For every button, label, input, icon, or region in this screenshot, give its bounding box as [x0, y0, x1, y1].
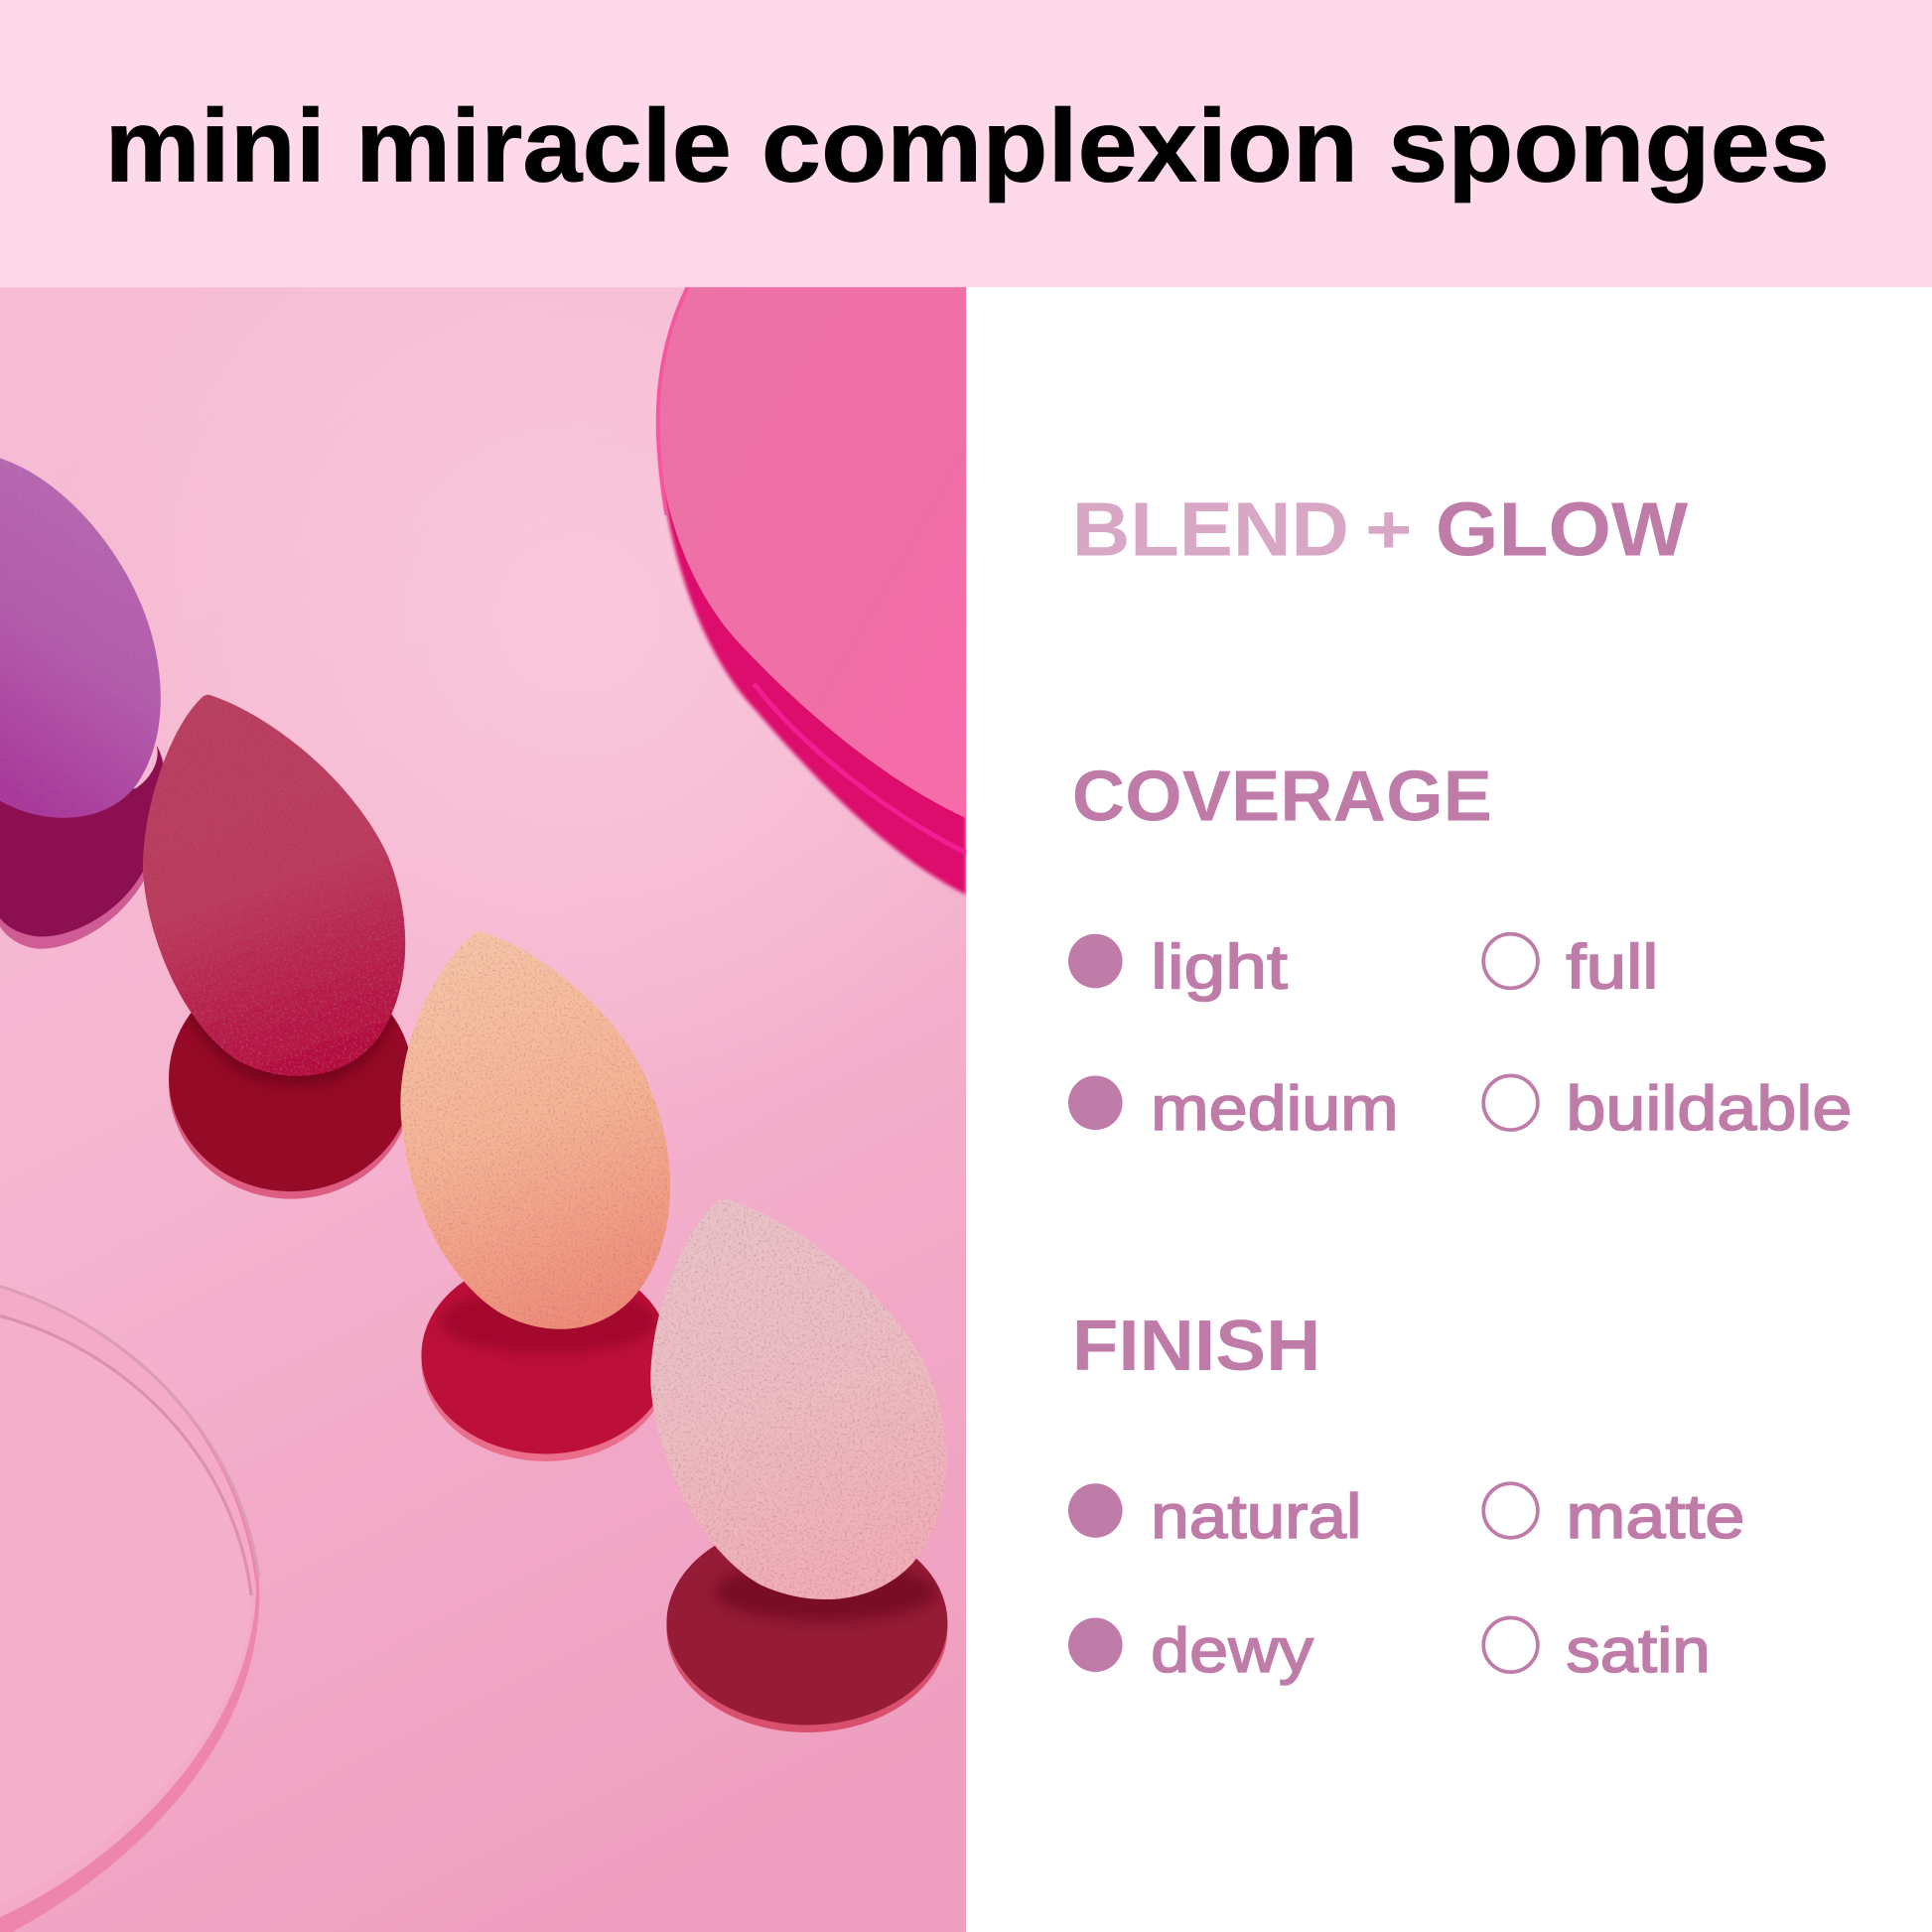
- header band: [0, 0, 1932, 287]
- option: medium: medium: [1151, 1074, 1399, 1144]
- sponge: peach with reflection: [400, 931, 670, 1461]
- option: matte: [1483, 1482, 1744, 1552]
- sponge: red with reflection: [143, 695, 413, 1199]
- panel: benefits: [1068, 487, 1852, 1686]
- sponge: pale pink with reflection: [650, 1198, 947, 1732]
- panel: product photo: [0, 287, 966, 1932]
- option: full: [1483, 932, 1658, 1002]
- heading: blend + glow: GLOW: [1436, 487, 1689, 573]
- option: light: [1068, 932, 1288, 1002]
- option: dewy: [1068, 1616, 1313, 1686]
- option: natural: natural: [1151, 1482, 1361, 1552]
- section: finish: [1068, 1307, 1744, 1686]
- heading: coverage: COVERAGE: [1072, 758, 1492, 837]
- option: buildable: [1483, 1074, 1852, 1144]
- pink acrylic disc: [658, 287, 966, 895]
- section: coverage: [1068, 758, 1852, 1144]
- sponge: purple with reflection: [0, 459, 167, 949]
- option: buildable: buildable: [1566, 1074, 1852, 1144]
- option: natural: [1068, 1482, 1361, 1552]
- option: light: light: [1151, 932, 1288, 1002]
- option: full: full: [1566, 932, 1658, 1002]
- clear acrylic disc: [0, 1287, 259, 1932]
- heading: blend + glow: BLEND: [1072, 487, 1349, 573]
- option: dewy: dewy: [1151, 1616, 1313, 1686]
- heading: finish: FINISH: [1072, 1307, 1320, 1386]
- option: satin: [1483, 1616, 1711, 1686]
- heading: blend + glow: +: [1365, 490, 1412, 568]
- option: medium: [1068, 1074, 1399, 1144]
- heading: blend + glow: [1072, 487, 1689, 573]
- option: matte: matte: [1566, 1482, 1744, 1552]
- title: mini miracle complexion sponges: [104, 88, 1830, 204]
- option: satin: satin: [1566, 1616, 1711, 1686]
